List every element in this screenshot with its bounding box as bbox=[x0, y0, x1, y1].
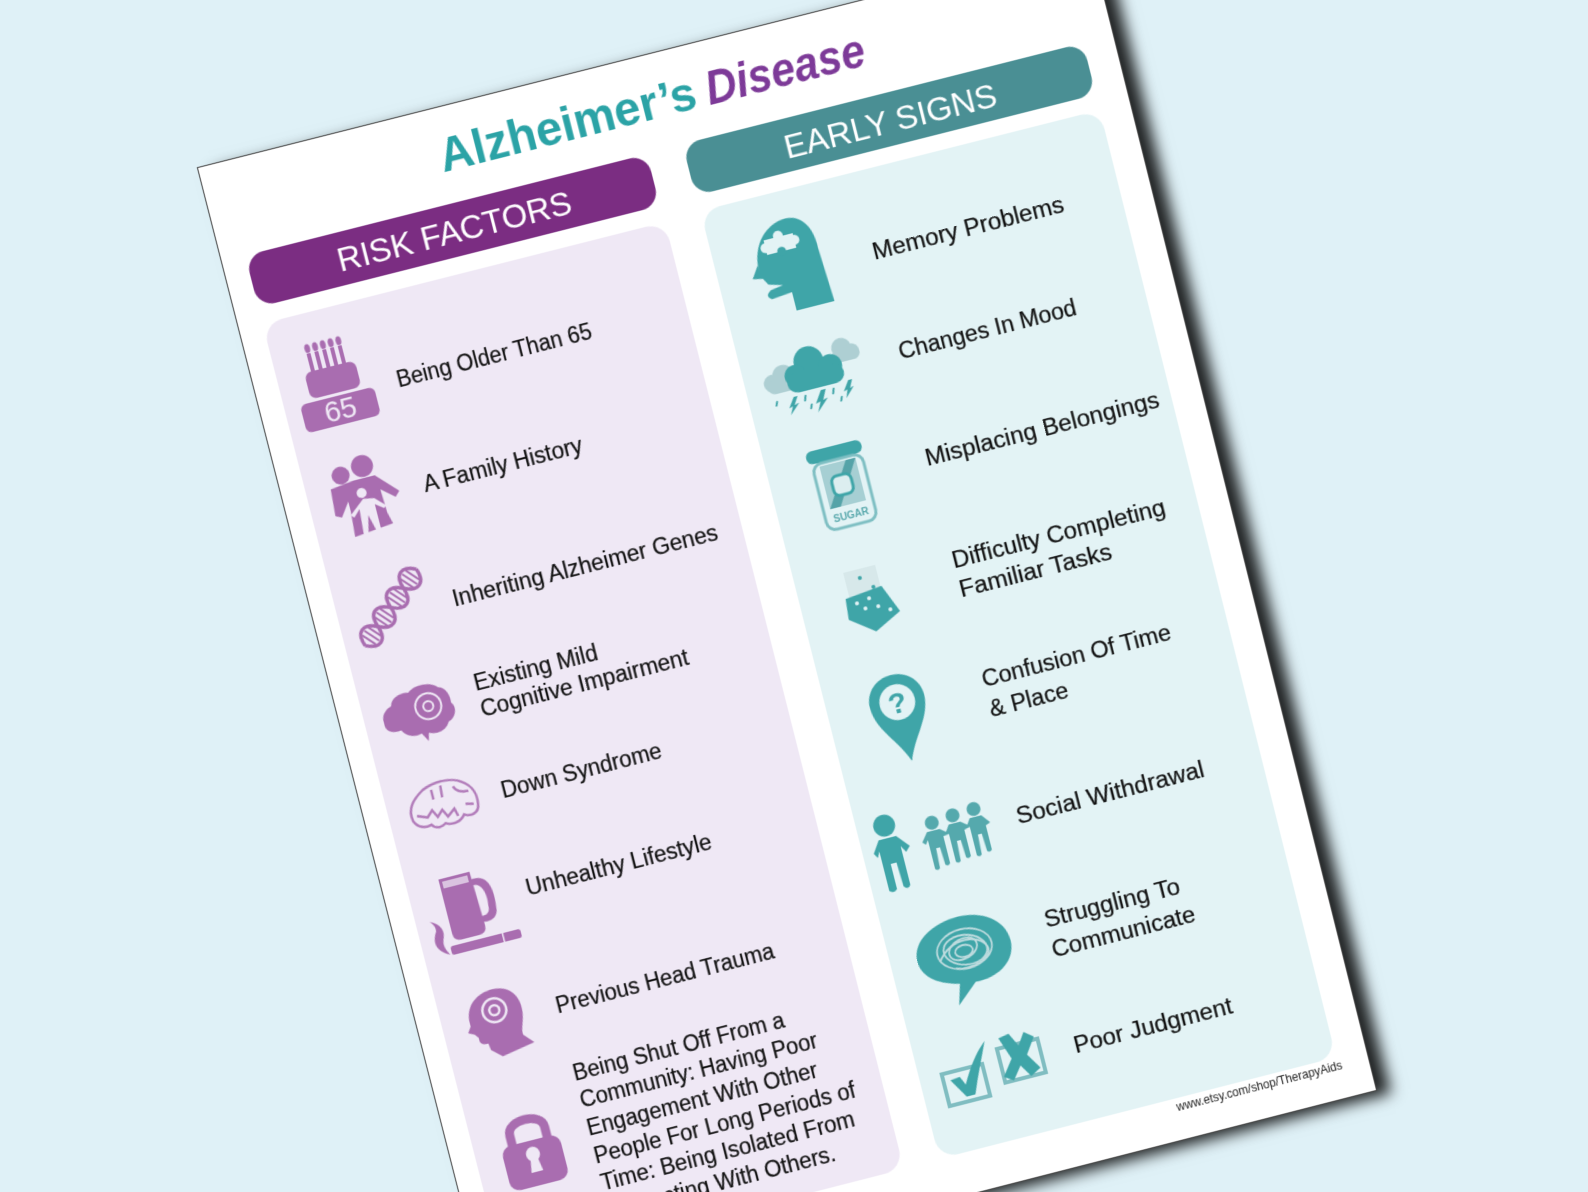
icon: location pin with question mark bbox=[863, 668, 939, 768]
risk factor labels: Community: Having Poor bbox=[581, 1035, 826, 1120]
icon: DNA helix bbox=[356, 563, 426, 652]
risk factor labels: People For Long Periods of bbox=[595, 1085, 865, 1176]
heading: early signs bbox=[683, 43, 1096, 196]
icon: mug and cigarette bbox=[420, 863, 522, 960]
early sign labels: Changes In Mood bbox=[899, 296, 1084, 366]
icon: birthday cake 65: 65 bbox=[322, 392, 361, 431]
icon: brain with target bbox=[377, 678, 461, 751]
icon: head with target bbox=[459, 982, 536, 1063]
icon: brain outline bbox=[405, 774, 482, 833]
footer url: www.etsy.com/shop/TherapyAids bbox=[1185, 1068, 1357, 1124]
early sign labels bbox=[870, 180, 1308, 1059]
icon: padlock bbox=[495, 1112, 570, 1192]
icon: watch in sugar jar: SUGAR bbox=[836, 508, 875, 528]
icon: playing cards bbox=[837, 562, 903, 637]
title bbox=[433, 24, 871, 183]
risk factor labels: Being Older Than 65 bbox=[394, 319, 596, 393]
early sign labels: Memory Problems bbox=[872, 192, 1071, 266]
risk factor labels: Previous Head Trauma bbox=[556, 944, 782, 1024]
early sign labels: Social Withdrawal bbox=[1020, 762, 1216, 835]
heading: risk factors bbox=[245, 154, 660, 307]
icon: location pin with question mark: ? bbox=[890, 689, 916, 726]
risk factor labels bbox=[394, 300, 875, 1192]
icon: person apart from group bbox=[865, 789, 1001, 894]
early sign labels: Confusion Of Time bbox=[985, 623, 1181, 696]
risk factor labels: A Family History bbox=[421, 433, 587, 498]
early sign labels: Poor Judgment bbox=[1080, 1001, 1247, 1067]
icon: family bbox=[322, 448, 408, 540]
title: Disease bbox=[701, 24, 873, 116]
early sign labels: Communicate bbox=[1057, 908, 1208, 970]
risk factor labels: Cognitive Impairment bbox=[479, 647, 695, 725]
heading: risk factors: RISK FACTORS bbox=[334, 185, 577, 280]
title: Alzheimer’s bbox=[433, 66, 703, 183]
early sign labels: Difficulty Completing bbox=[954, 497, 1175, 576]
icon: birthday cake 65 bbox=[286, 331, 381, 435]
risk factor labels: Being Shut Off From a bbox=[574, 1014, 793, 1093]
icon: storm clouds bbox=[757, 334, 871, 424]
panel: risk factors bbox=[263, 222, 904, 1192]
icon: check and cross boxes bbox=[936, 1027, 1048, 1106]
icon: head with puzzle piece bbox=[740, 212, 834, 319]
early sign labels: & Place bbox=[992, 681, 1078, 726]
early sign labels: Familiar Tasks bbox=[962, 542, 1121, 606]
icon: watch in sugar jar bbox=[805, 439, 880, 532]
risk factor labels: Existing Mild bbox=[473, 642, 603, 698]
early sign labels: Struggling To bbox=[1049, 880, 1192, 940]
panel: early signs bbox=[700, 110, 1336, 1159]
risk factor labels: Inheriting Alzheimer Genes bbox=[451, 521, 724, 614]
risk factor labels: Unhealthy Lifestyle bbox=[526, 833, 718, 905]
risk factor labels: Engagement With Other bbox=[588, 1064, 827, 1148]
heading: early signs: EARLY SIGNS bbox=[782, 78, 1004, 167]
poster sheet bbox=[198, 0, 1376, 1192]
risk factor labels: Down Syndrome bbox=[500, 741, 668, 807]
early sign labels: Misplacing Belongings bbox=[927, 389, 1168, 473]
icon: speech bubble with scribble bbox=[909, 905, 1023, 1013]
